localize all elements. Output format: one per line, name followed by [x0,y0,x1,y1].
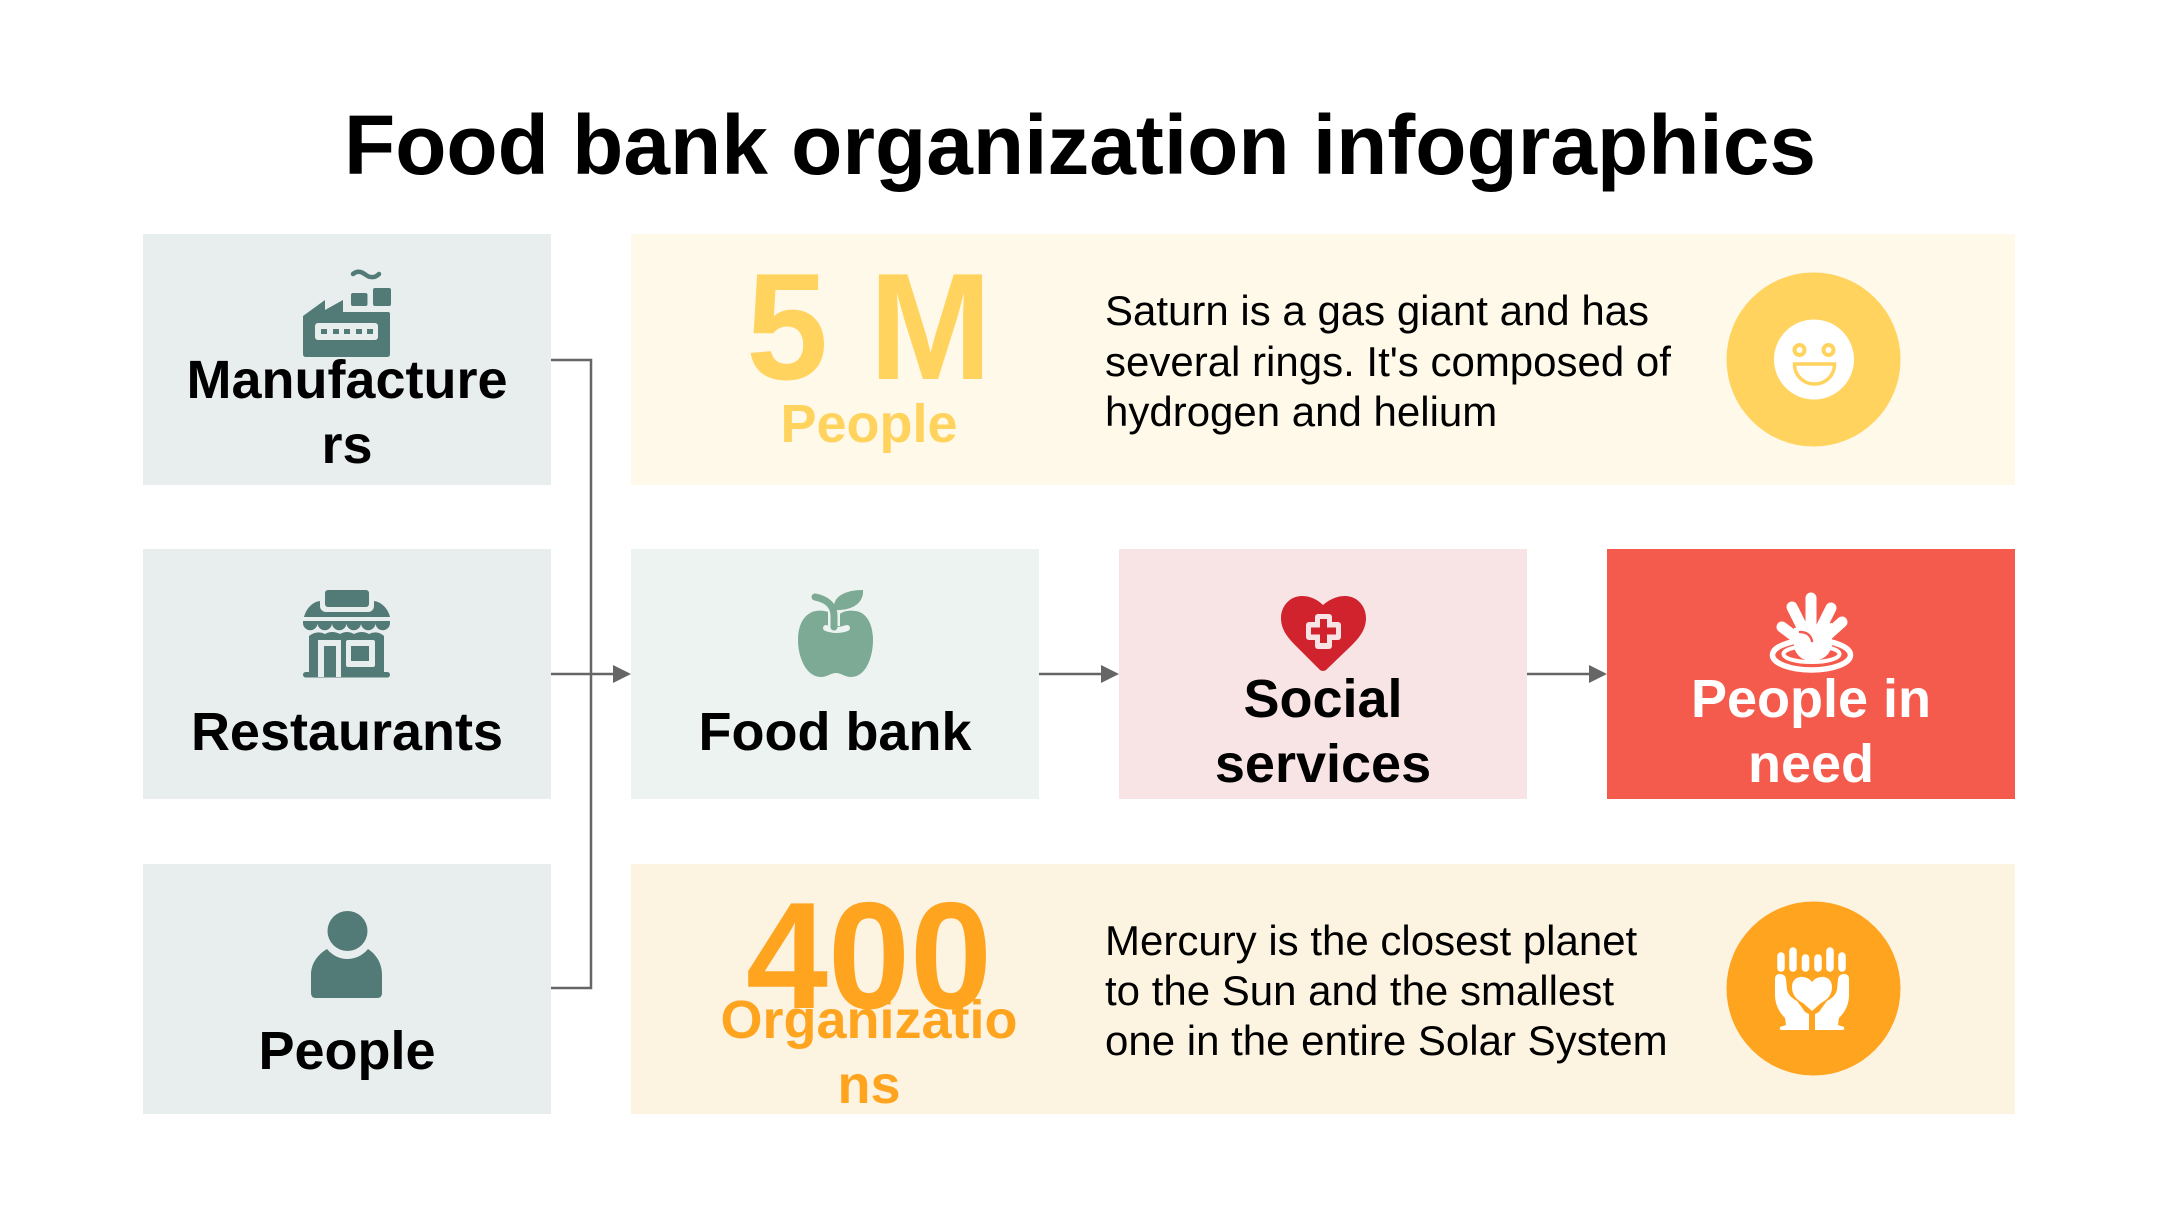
icon: heart with medical cross [1281,596,1366,671]
icon: smiley in yellow circle [1726,272,1900,446]
icon: person [311,911,382,998]
description: Mercury: to the Sun and the smallest [1105,967,1614,1014]
label: food bank: Food bank [699,702,972,762]
panel: people in need [1607,549,2015,799]
icon: hands holding heart in orange circle [1726,902,1900,1076]
description: Saturn: Saturn is a gas giant and has [1105,287,1649,334]
icon: reaching hand [1772,598,1850,670]
panel: food bank [631,549,1039,799]
label: social services: services [1215,734,1431,794]
label: people in need: People in [1691,669,1931,729]
panel: social services [1119,549,1527,799]
stat label: organizations: Organizatio [720,990,1018,1050]
icon: factory [303,272,391,357]
label: social services: Social [1243,669,1403,729]
stat: 5 M: 5 M [746,241,992,411]
stat label: people: People [780,394,958,454]
description: Mercury: one in the entire Solar System [1105,1017,1668,1064]
panel: restaurants [143,549,551,799]
icon: apple [798,590,873,677]
description: Saturn: hydrogen and helium [1105,388,1497,435]
label: restaurants: Restaurants [191,702,503,762]
description: Saturn: several rings. It's composed of [1105,338,1671,385]
panel: 5 M people [631,234,2015,485]
label: people in need: need [1748,734,1874,794]
panel: people [143,864,551,1114]
arrow: social services to people in need [1527,665,1607,683]
description: Mercury: Mercury is the closest planet [1105,917,1638,964]
arrow: food bank to social services [1039,665,1119,683]
panel: 400 organizations [631,864,2015,1115]
label: people: People [258,1021,436,1081]
stat: 400: 400 [746,870,992,1040]
stat label: organizations: ns [837,1055,901,1115]
icon: store [303,588,390,678]
panel: manufacturers [143,234,551,485]
title: Food bank organization infographics [344,98,1816,192]
label: manufacturers: rs [321,415,373,475]
label: manufacturers: Manufacture [186,350,508,410]
connector: sources to food bank [551,360,631,988]
